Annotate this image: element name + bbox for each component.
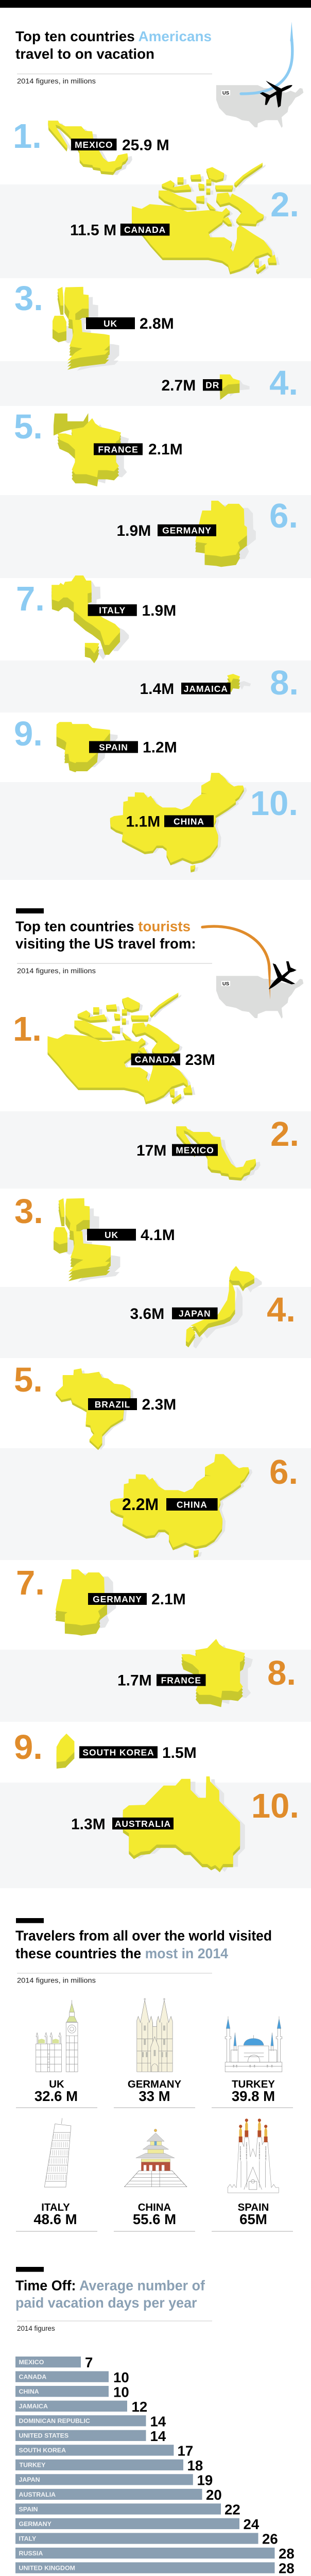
bar chart: paid vacation days: 22 <box>224 2502 240 2518</box>
divider and note: 2014 figures, in millions <box>17 967 96 975</box>
title: Americans: Top ten countries Americans <box>15 28 212 44</box>
rank 6 China <box>110 1453 298 1557</box>
bar chart: paid vacation days: 10 <box>113 2384 129 2400</box>
bar chart: paid vacation days: SOUTH KOREA <box>19 2447 66 2454</box>
icon: Cologne Cathedral <box>137 1998 172 2072</box>
bar chart: paid vacation days: JAMAICA <box>19 2403 48 2410</box>
rank 4 Japan: 3.6M <box>130 1306 164 1323</box>
rank 8 France: 8. <box>267 1654 296 1692</box>
bar chart: paid vacation days: TURKEY <box>20 2462 46 2469</box>
bar chart: paid vacation days <box>15 2354 296 2576</box>
rank 4 Dominican Republic: 4. <box>269 364 298 402</box>
rank 9 Spain <box>14 715 177 772</box>
rank 5 Brazil: 2.3M <box>142 1396 176 1413</box>
section marker <box>16 1918 44 1923</box>
rank 2 Mexico: MEXICO <box>176 1145 214 1155</box>
icon: US map with departing plane <box>216 22 303 128</box>
bar chart: paid vacation days: 14 <box>150 2428 166 2444</box>
rank 1 Canada <box>13 993 215 1105</box>
icon: US map with departing plane: US <box>222 91 229 96</box>
rank 2 Canada: 2. <box>270 185 299 224</box>
background bands <box>0 184 311 1888</box>
rank 7 Germany: 2.1M <box>151 1591 186 1608</box>
rank 6 China: 2.2M <box>122 1495 159 1514</box>
rank 10 Australia: 10. <box>251 1787 299 1825</box>
rank 9 Spain: SPAIN <box>99 742 128 752</box>
bar chart: paid vacation days: 10 <box>113 2369 129 2385</box>
rank 5 France: FRANCE <box>98 444 139 454</box>
title: tourists <box>15 918 196 952</box>
rank 1 Mexico: 25.9 M <box>122 137 169 154</box>
stat: Italy: 48.6 M <box>33 2211 77 2227</box>
rank 6 China: 6. <box>269 1453 298 1492</box>
bar chart: paid vacation days: GERMANY <box>19 2520 52 2528</box>
rank 7 Germany: 7. <box>16 1564 45 1602</box>
stat: UK <box>16 2079 97 2108</box>
bar chart: paid vacation days: DOMINICAN REPUBLIC <box>19 2417 90 2425</box>
bar chart: paid vacation days: 24 <box>243 2516 260 2532</box>
bar chart: paid vacation days: 26 <box>262 2531 278 2547</box>
panel: top ten countries tourists travel from <box>13 908 303 1872</box>
rank 2 Mexico: 17M <box>136 1142 166 1159</box>
bar chart: paid vacation days: 14 <box>150 2413 166 2429</box>
rank 4 Japan <box>130 1266 296 1349</box>
panel: top ten countries Americans travel to <box>13 22 303 873</box>
panel: time off <box>15 2267 296 2576</box>
rank 1 Mexico <box>13 117 169 175</box>
stat: Italy <box>16 2202 97 2231</box>
rank 1 Canada: CANADA <box>135 1055 177 1065</box>
divider and note: 2014 figures, in millions <box>17 1976 96 1985</box>
rank 4 Dominican Republic <box>162 364 298 402</box>
bar chart: paid vacation days: 17 <box>177 2443 193 2459</box>
rank 2 Canada: CANADA <box>124 225 166 235</box>
bar chart: paid vacation days: CHINA <box>19 2388 39 2395</box>
rank 3 UK: UK <box>105 1230 118 1240</box>
rank 8 Jamaica: 1.4M <box>140 681 174 698</box>
rank 3 UK <box>14 1192 175 1282</box>
icon: Leaning Tower of Pisa <box>44 2118 71 2187</box>
bar chart: paid vacation days: CANADA <box>19 2373 46 2380</box>
rank 10 China: CHINA <box>174 816 204 826</box>
stat: Turkey: TURKEY <box>232 2079 275 2090</box>
rank 5 Brazil: 5. <box>14 1361 43 1399</box>
rank 4 Japan: 4. <box>267 1291 296 1329</box>
rank 8 Jamaica <box>140 664 299 702</box>
rank 5 France: 5. <box>14 408 43 446</box>
rank 6 Germany: GERMANY <box>162 526 212 536</box>
rank 10 Australia <box>71 1776 299 1872</box>
top black bar <box>0 0 311 8</box>
rank 2 Mexico: 2. <box>270 1115 299 1154</box>
rank 8 France <box>117 1639 296 1707</box>
bar chart: paid vacation days: ITALY <box>19 2535 37 2542</box>
title: time off: paid vacation days per year <box>15 2295 197 2311</box>
stat: Germany: 33 M <box>139 2088 170 2104</box>
rank 2 Canada: 11.5 M <box>70 222 116 239</box>
divider and note: 2014 figures, in millions <box>17 77 96 85</box>
stat: Turkey <box>212 2079 293 2108</box>
rank 3 UK <box>14 279 174 371</box>
rank 10 Australia: AUSTRALIA <box>115 1819 171 1829</box>
bar chart: paid vacation days: 19 <box>197 2472 213 2488</box>
rank 9 South Korea <box>14 1728 197 1769</box>
rank 9 South Korea: 9. <box>14 1728 43 1767</box>
rank 6 China: CHINA <box>177 1499 208 1510</box>
rank 2 Mexico <box>136 1115 299 1181</box>
rank 7 Italy <box>16 575 176 663</box>
title: most visited: these countries the most in 2014 <box>15 1945 229 1961</box>
bar chart: paid vacation days: 12 <box>132 2399 147 2415</box>
bar chart: paid vacation days: 28 <box>279 2546 295 2562</box>
stat: China: CHINA <box>138 2202 171 2213</box>
icon: Sagrada Familia <box>228 2119 279 2193</box>
rank 5 France <box>14 408 183 486</box>
rank 7 Italy: 7. <box>16 580 45 618</box>
rank 5 Brazil <box>14 1361 176 1450</box>
rank 1 Mexico: 1. <box>13 117 42 156</box>
rank 5 Brazil: BRAZIL <box>95 1399 130 1410</box>
rank 10 China: 10. <box>250 784 298 823</box>
rank 9 South Korea: SOUTH KOREA <box>82 1748 154 1758</box>
rank 7 Germany: GERMANY <box>93 1594 142 1604</box>
rank 1 Mexico: MEXICO <box>75 140 113 150</box>
bar chart: paid vacation days: AUSTRALIA <box>19 2491 56 2498</box>
icon: US map with arriving plane: US <box>222 981 229 987</box>
stat: UK: 32.6 M <box>34 2088 78 2104</box>
stat: China: 55.6 M <box>133 2211 176 2227</box>
icon: Big Ben and Parliament <box>36 2000 78 2072</box>
rank 6 Germany: 6. <box>269 497 298 535</box>
stat: Italy: ITALY <box>41 2202 70 2213</box>
bar chart: paid vacation days: 18 <box>187 2458 203 2473</box>
bar chart: paid vacation days: SPAIN <box>19 2505 38 2513</box>
rank 7 Germany <box>16 1564 186 1636</box>
stat: Germany: GERMANY <box>128 2079 182 2090</box>
stat: China <box>114 2202 195 2231</box>
rank 8 Jamaica: 8. <box>270 664 299 702</box>
rank 4 Dominican Republic: 2.7M <box>162 377 196 394</box>
title: most visited <box>15 1928 272 1961</box>
rank 6 Germany: 1.9M <box>116 522 151 539</box>
title: Americans: travel to on vacation <box>15 46 154 62</box>
stat: Spain: SPAIN <box>238 2202 269 2213</box>
rank 8 Jamaica: JAMAICA <box>184 684 228 694</box>
bar chart: paid vacation days: JAPAN <box>19 2476 40 2483</box>
rank 10 China <box>110 773 298 873</box>
section marker <box>16 2267 44 2272</box>
title: tourists: visiting the US travel from: <box>15 936 196 952</box>
rank 7 Italy: 1.9M <box>142 602 176 619</box>
rank 8 France: 1.7M <box>117 1672 152 1689</box>
rank 3 UK: UK <box>103 318 117 329</box>
rank 4 Dominican Republic: DR <box>205 380 219 391</box>
rank 9 Spain: 1.2M <box>143 739 177 756</box>
panel: most visited countries <box>15 1918 293 2231</box>
section marker <box>16 908 44 913</box>
title: tourists: Top ten countries tourists <box>15 918 191 934</box>
rank 3 UK: 3. <box>14 1192 43 1231</box>
title: time off <box>15 2278 205 2311</box>
rank 2 Canada <box>70 163 299 275</box>
stat: Germany <box>114 2079 195 2108</box>
icon: US map with arriving plane <box>202 926 303 1019</box>
bar chart: paid vacation days: 7 <box>85 2354 93 2370</box>
rank 4 Japan: JAPAN <box>179 1309 211 1319</box>
rank 10 China: 1.1M <box>126 814 160 831</box>
rank 3 UK: 4.1M <box>141 1227 175 1244</box>
icon: Blue Mosque <box>225 2016 282 2072</box>
stat: Turkey: 39.8 M <box>232 2088 275 2104</box>
bar chart: paid vacation days: 28 <box>279 2561 295 2576</box>
rank 7 Italy: ITALY <box>99 605 126 616</box>
bar chart: paid vacation days: UNITED KINGDOM <box>19 2564 75 2571</box>
divider and note: 2014 figures <box>17 2325 55 2332</box>
title: Americans <box>15 28 212 62</box>
stat: UK: UK <box>49 2079 64 2090</box>
rank 3 UK: 2.8M <box>140 315 174 332</box>
title: time off: Time Off: Average number of <box>15 2278 205 2294</box>
title: most visited: Travelers from all over the world visited <box>15 1928 272 1944</box>
rank 1 Canada: 23M <box>185 1052 215 1069</box>
rank 6 Germany <box>116 497 298 567</box>
bar chart: paid vacation days: RUSSIA <box>19 2550 43 2557</box>
rank 10 Australia: 1.3M <box>71 1816 106 1833</box>
stat: Spain: 65M <box>239 2211 267 2227</box>
bar chart: paid vacation days: UNITED STATES <box>19 2432 68 2439</box>
rank 3 UK: 3. <box>14 279 43 318</box>
rank 8 France: FRANCE <box>161 1675 201 1685</box>
bar chart: paid vacation days: MEXICO <box>19 2359 44 2366</box>
stat: Spain <box>212 2202 293 2231</box>
rank 9 South Korea: 1.5M <box>162 1744 197 1761</box>
rank 5 France: 2.1M <box>148 441 183 458</box>
rank 9 Spain: 9. <box>14 715 43 753</box>
bar chart: paid vacation days: 20 <box>206 2487 222 2503</box>
rank 1 Canada: 1. <box>13 1010 42 1048</box>
icon: Temple of Heaven <box>125 2129 187 2187</box>
